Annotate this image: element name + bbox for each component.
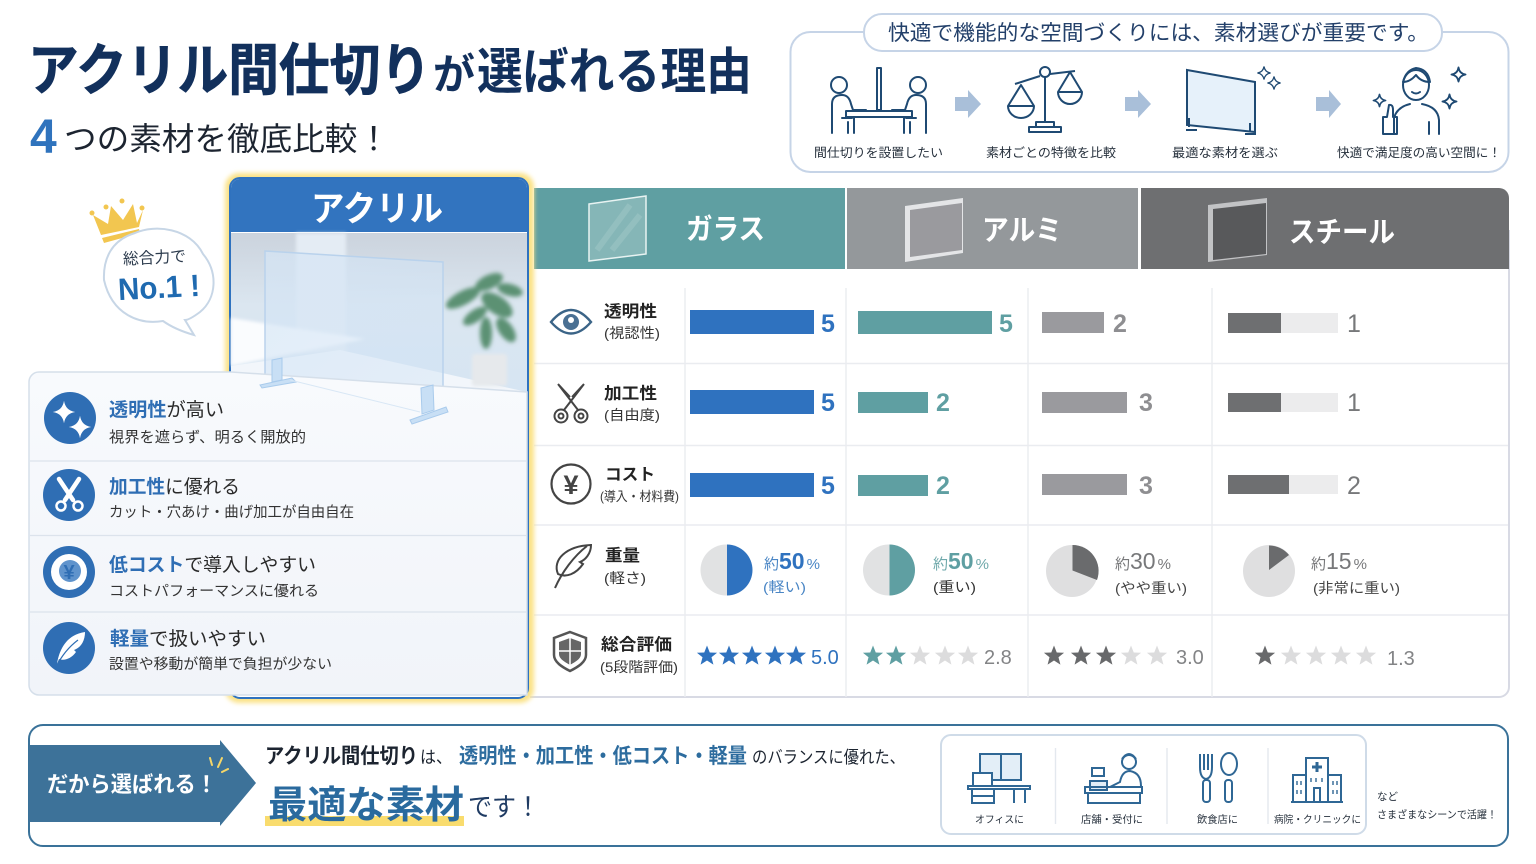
icon: hospital [1291,758,1343,802]
header: glass [534,188,845,269]
feature: workability: 加工性に優れる [109,476,240,498]
stars: acrylic [697,645,839,669]
pie: aluminium 30% [1046,545,1187,597]
row: workability: 5 [821,389,835,417]
flow heading pill: 快適で機能的な空間づくりには、素材選びが重要です。 [888,22,1429,45]
row: overall rating [554,632,1415,675]
feature: transparency: 透明性が高い [109,399,224,421]
icon: feather [555,545,591,588]
icon: balance scale [1008,67,1082,132]
step labels [814,145,1501,160]
icon: acrylic panel [1186,66,1281,134]
scene labels: オフィスに [975,814,1024,826]
stars: steel: 1.3 [1387,648,1415,670]
row: transparency: 5 [821,310,835,338]
panel: conclusion [29,725,1508,846]
icon: two people at partition [831,68,926,133]
conclusion text line: アクリル間仕切り [265,745,418,768]
row: workability: 3 [1139,389,1153,417]
step labels: 最適な素材を選ぶ [1172,146,1278,160]
scene labels: 飲食店に [1197,813,1238,826]
icon: reception [1085,754,1142,803]
step labels: 間仕切りを設置したい [814,146,943,160]
row: transparency: 透明性 [604,302,657,321]
row: cost: (導入・材料費) [600,489,679,504]
pie: aluminium 30%: (やや重い) [1115,580,1187,596]
icon: yen coin [43,546,95,598]
row: transparency: 5 [999,310,1013,338]
badge: No.1: No.1 ! [117,268,201,307]
step labels: 快適で満足度の高い空間に！ [1337,145,1501,160]
header: steel: スチール [1289,217,1395,249]
feature: transparency: 視界を遮らず、明るく開放的 [109,429,306,446]
stars: aluminium: 3.0 [1176,647,1204,669]
scenes note [1377,791,1497,821]
arrow [955,90,981,118]
header: steel [1141,188,1509,269]
stars: aluminium [1044,645,1204,669]
acrylic header [231,179,527,232]
row: transparency: 2 [1113,310,1127,338]
icon: cutlery [1200,753,1237,802]
row: workability: 加工性 [604,384,657,403]
row: weight: (軽さ) [604,570,646,586]
pie: glass 50%: 約50% [933,548,989,574]
feature: low cost: コストパフォーマンスに優れる [109,583,319,600]
icon: eye [551,310,591,334]
row: workability: (自由度) [604,407,660,423]
stars: glass [863,645,1012,669]
pie: glass 50% [863,544,989,596]
pie: aluminium 30%: 約30% [1115,548,1171,574]
subtitle: 4 [30,111,57,164]
feature: low cost [43,546,319,600]
icon: yen coin: ¥ [63,562,75,584]
subtitle [30,111,390,164]
conclusion emphasis [265,785,540,827]
panel: usage scenes [941,735,1366,834]
pie: acrylic 50% [700,544,820,596]
badge: No.1 [90,198,214,335]
row: cost: 5 [821,472,835,500]
row: transparency: (視認性) [604,325,660,341]
header: aluminium: アルミ [982,215,1062,247]
icon: yen coin [552,464,590,504]
arrow [1316,90,1341,118]
conclusion emphasis: 最適な素材 [268,785,464,827]
row: transparency [551,302,1361,341]
acrylic feet [260,358,448,424]
row: weight [555,544,1400,597]
row: workability: 1 [1347,389,1361,417]
pie: steel 15%: (非常に重い) [1313,580,1400,596]
panel: acrylic highlight card [29,173,534,703]
arrow [1125,90,1151,118]
scene labels: 店舗・受付に [1081,813,1143,826]
feature: low cost: 低コストで導入しやすい [109,554,316,576]
speech bubble [104,229,214,335]
feature: lightweight [43,622,332,674]
comparison table [530,188,1509,697]
conclusion text line: は、 [420,748,452,767]
feature: lightweight: 軽量で扱いやすい [110,628,266,650]
panel: process flow [790,14,1508,172]
conclusion emphasis: です！ [468,792,540,822]
pie: steel 15% [1243,545,1400,597]
badge: No.1: 総合力で [123,247,186,269]
feature: workability: カット・穴あけ・曲げ加工が自由自在 [109,504,354,521]
row: overall rating: (5段階評価) [600,659,678,675]
pie: acrylic 50%: (軽い) [763,579,806,595]
title: アクリル間仕切り [28,39,431,102]
title [28,39,752,102]
arrow label [29,740,256,826]
scenes note: など [1377,791,1398,803]
plant [443,269,524,349]
icon: scissors [554,384,588,422]
row: cost: 2 [936,472,950,500]
scenes note: さまざまなシーンで活躍！ [1377,808,1497,821]
icon: shield [554,632,586,671]
step labels: 素材ごとの特徴を比較 [986,145,1117,160]
scene labels [975,813,1361,826]
pie: steel 15%: 約15% [1311,548,1367,574]
arrow label: だから選ばれる！ [47,772,217,797]
feature: transparency [44,392,306,446]
row: weight: 重量 [605,546,640,565]
scene labels: 病院・クリニックに [1274,814,1361,826]
conclusion text line: 透明性・加工性・低コスト・軽量 [459,745,747,768]
feature: workability [43,469,354,521]
row: cost [552,464,1361,504]
stars: steel [1255,645,1415,670]
header: glass: ガラス [686,213,765,246]
icon: crown [90,198,144,243]
feature: lightweight: 設置や移動が簡単で負担が少ない [109,656,332,673]
icon: feather [43,622,95,674]
row: cost: 2 [1347,472,1361,500]
title: 選ばれる理由 [477,44,752,100]
icon: scissors [43,469,95,521]
photo: acrylic partition on desk [231,233,527,402]
conclusion text line: のバランスに優れた、 [752,748,905,767]
icon: sparkles [44,392,96,444]
row: cost: コスト [605,466,655,484]
stars: acrylic: 5.0 [811,647,839,669]
row: workability [554,384,1361,423]
acrylic header: アクリル [311,190,443,229]
flow heading pill [864,14,1442,51]
subtitle: つの素材を徹底比較！ [64,121,390,157]
title: が [433,51,475,98]
icon: office [968,754,1030,803]
header: aluminium [847,188,1138,269]
pie: glass 50%: (重い) [933,579,976,595]
conclusion text line [265,745,905,768]
row: overall rating: 総合評価 [601,635,672,654]
icon: satisfied person [1373,67,1466,134]
stars: glass: 2.8 [984,647,1012,669]
row: transparency: 1 [1347,310,1361,338]
row: workability: 2 [936,389,950,417]
row: cost: 3 [1139,472,1153,500]
icon: yen coin: ¥ [563,470,579,500]
pie: acrylic 50%: 約50% [764,548,820,574]
